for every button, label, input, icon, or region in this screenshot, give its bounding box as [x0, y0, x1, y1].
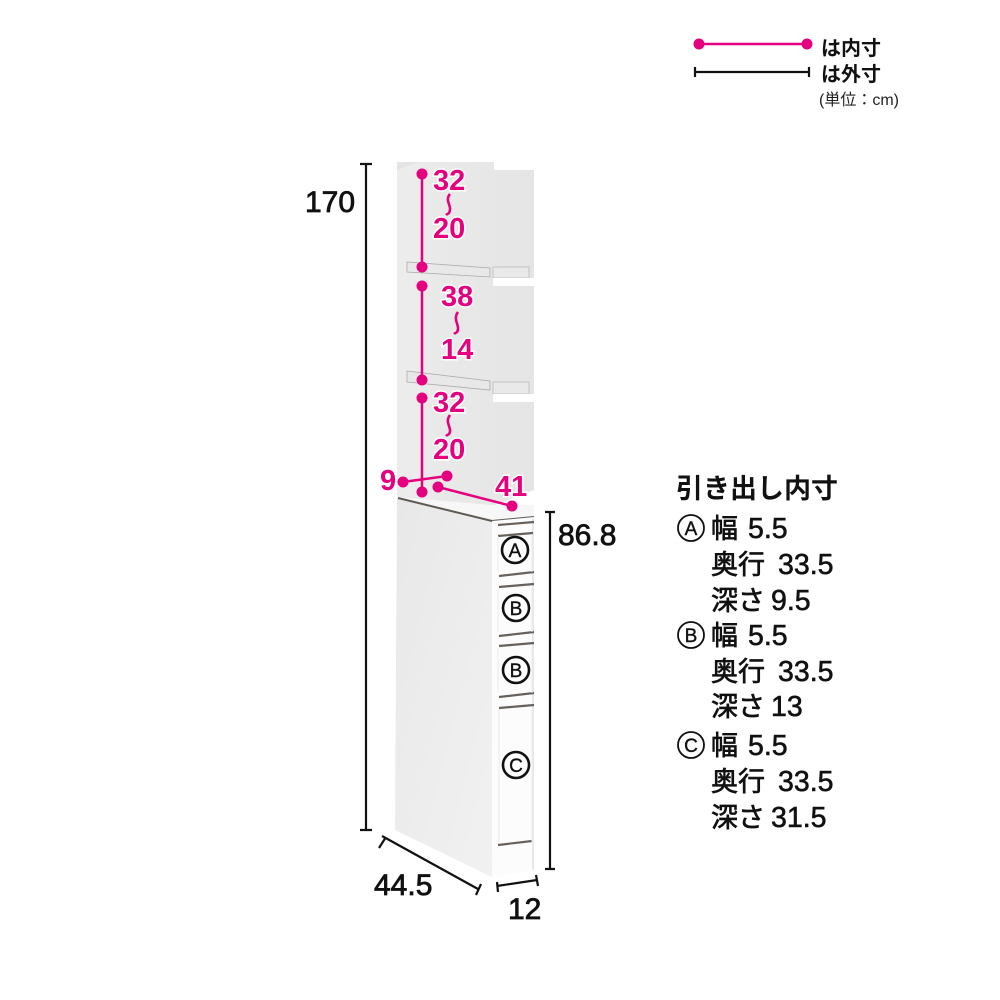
drawer label B: B [510, 599, 522, 620]
drawer B dimensions: 深さ [711, 692, 765, 722]
outer dimension: base height 86.8 [545, 512, 616, 869]
drawer C dimensions: 深さ [711, 803, 765, 833]
drawer A dimensions: 5.5 [748, 513, 788, 545]
drawer B dimensions: 奥行 [711, 657, 765, 687]
drawer C dimensions [678, 730, 833, 834]
drawer B dimensions: 5.5 [748, 620, 788, 652]
drawer A dimensions: 幅 [711, 514, 738, 544]
inner dimension: depth 41 [432, 471, 527, 512]
legend: inner dimension label: は内寸 [821, 37, 881, 60]
drawer C dimensions: 奥行 [711, 767, 765, 797]
drawer C dimensions: C [684, 736, 698, 757]
outer dimension: height 170 [305, 164, 372, 830]
drawer A dimensions: 深さ [711, 586, 765, 616]
legend: outer dimension line [695, 67, 809, 77]
drawer C dimensions: 幅 [711, 731, 738, 761]
shelf 2 [407, 371, 535, 402]
drawer label B [503, 595, 529, 621]
drawer B dimensions: B [685, 626, 697, 647]
drawer A dimensions: 9.5 [771, 585, 811, 617]
drawer label A: A [509, 541, 522, 562]
drawer C dimensions: 33.5 [778, 766, 833, 798]
drawer B dimensions: 33.5 [778, 656, 833, 688]
legend: unit note: (単位：cm) [819, 91, 899, 109]
legend [694, 37, 899, 109]
drawer label A [502, 537, 528, 563]
lower cabinet front [492, 517, 534, 877]
inner dimension: middle shelf: 14 [441, 334, 473, 366]
shelf 1 [407, 262, 535, 286]
drawer heading: 引き出し内寸 [676, 474, 838, 504]
outer dimension: width 12 [497, 875, 541, 926]
inner dimension: top shelf [416, 165, 465, 272]
drawer B dimensions [678, 620, 833, 723]
inner dimension: width 9: 9 [380, 465, 396, 497]
counter top [398, 497, 534, 521]
inner dimension: middle shelf: 38 [441, 281, 473, 313]
inner dimension: middle shelf [416, 280, 473, 386]
drawer label B: B [510, 661, 522, 682]
legend: outer dimension label: は外寸 [821, 63, 881, 86]
drawer A dimensions: 奥行 [711, 550, 765, 580]
inner dimension: top shelf: 20 [433, 213, 465, 245]
drawer B dimensions: 幅 [711, 621, 738, 651]
upper shelf unit [397, 162, 535, 506]
drawer label C [503, 752, 529, 778]
outer dimension: depth 44.5 [374, 836, 481, 902]
inner dimension: lower shelf: 20 [433, 434, 465, 466]
inner dimension: top shelf: 32 [433, 165, 465, 197]
outer dimension: width 12: 12 [508, 893, 541, 926]
drawer C dimensions: 31.5 [771, 802, 826, 834]
drawer inner dimensions [676, 474, 838, 834]
drawer label C: C [509, 756, 523, 777]
drawer A dimensions: A [685, 519, 698, 540]
inner dimension: depth 41: 41 [495, 471, 527, 503]
lower cabinet side panel [395, 498, 492, 877]
inner dimension: width 9 [380, 465, 452, 497]
outer dimension: height 170: 170 [305, 186, 355, 219]
inner dimension: lower shelf [416, 387, 465, 498]
drawer A dimensions: 33.5 [778, 549, 833, 581]
outer dimension: base height 86.8: 86.8 [558, 519, 616, 552]
outer dimension: depth 44.5: 44.5 [374, 869, 432, 902]
drawer C dimensions: 5.5 [748, 730, 788, 762]
legend: inner dimension line [694, 38, 812, 50]
inner dimension: lower shelf: 32 [433, 387, 465, 419]
cabinet illustration [395, 162, 535, 877]
drawer A dimensions [678, 513, 833, 617]
drawer label B [503, 657, 529, 683]
drawer B dimensions: 13 [771, 691, 803, 723]
